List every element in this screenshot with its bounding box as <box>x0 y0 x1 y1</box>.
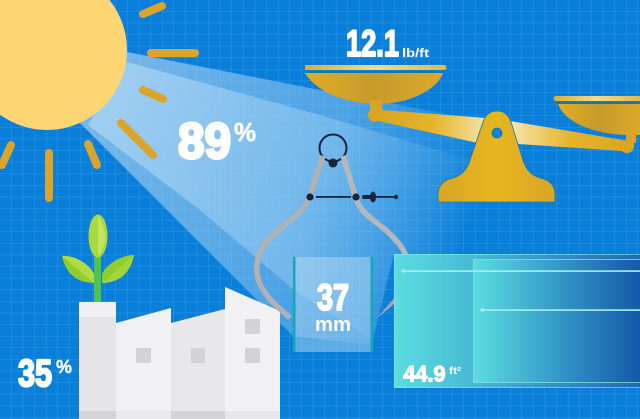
beam arm right <box>510 121 634 153</box>
caliper <box>257 134 406 319</box>
sun disc <box>0 0 127 130</box>
beam outer <box>80 52 640 345</box>
value: 44.9 <box>404 362 446 386</box>
beam arm left <box>368 108 486 143</box>
caliper ring <box>320 134 346 162</box>
outer panel <box>394 254 640 388</box>
windows <box>136 319 260 363</box>
left pan <box>305 65 446 112</box>
volume box <box>394 254 640 388</box>
sun <box>0 0 195 198</box>
top leaf <box>88 214 108 258</box>
stat: 35%: % <box>56 357 72 377</box>
value: 37 <box>317 277 349 318</box>
measurement card: 37 mm <box>293 257 373 352</box>
plant sprout <box>62 214 134 302</box>
pivot rivet <box>328 158 338 168</box>
stem <box>94 250 101 302</box>
stat: 12.1 lb/ft: lb/ft <box>402 48 429 60</box>
right pan <box>554 96 640 143</box>
inner panel <box>474 260 640 382</box>
chimney cap <box>79 302 116 317</box>
unit: ft² <box>449 366 462 377</box>
section 2 <box>171 309 225 419</box>
right leaf <box>102 255 134 283</box>
fulcrum <box>438 111 555 202</box>
factory building <box>79 287 280 419</box>
sun rays <box>2 6 195 198</box>
right leg tip <box>376 296 396 319</box>
arrow 1 <box>400 268 640 274</box>
arrow 2 <box>480 308 640 312</box>
chimney <box>79 302 116 419</box>
base band <box>79 411 280 419</box>
stat: 12.1 lb/ft: 12.1 <box>346 23 399 64</box>
balance scale <box>305 65 640 202</box>
stat: 89%: % <box>234 117 256 147</box>
left leaf <box>62 256 94 283</box>
right leg <box>343 156 406 256</box>
left leg <box>257 156 323 318</box>
stat: 89%: 89 <box>178 113 231 169</box>
beam inner <box>88 62 640 340</box>
card edges <box>293 257 296 352</box>
stat: 35%: 35 <box>18 353 52 395</box>
section 3 <box>225 287 280 419</box>
light beam <box>80 52 640 345</box>
card body <box>294 257 372 352</box>
adjusting rod <box>306 192 398 202</box>
unit: mm <box>315 314 351 336</box>
section 1 <box>116 308 171 419</box>
